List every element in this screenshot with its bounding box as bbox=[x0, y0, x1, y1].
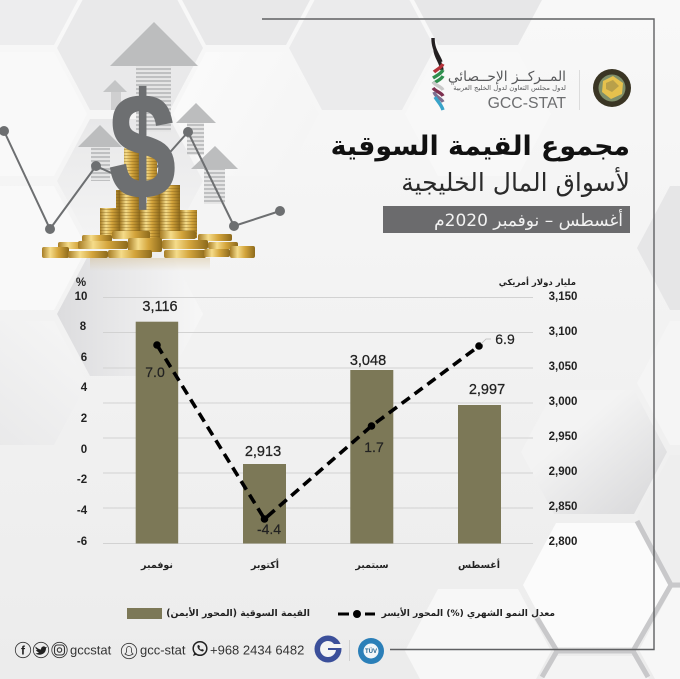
bars bbox=[136, 322, 501, 544]
left axis: -2 bbox=[77, 474, 87, 486]
left axis: 4 bbox=[81, 382, 88, 394]
icon: whatsapp bbox=[193, 642, 207, 656]
left axis: -4 bbox=[77, 505, 88, 517]
legend: growth rate bbox=[338, 607, 555, 619]
growth value labels: 1.7 bbox=[364, 439, 384, 455]
logo text arabic: المــركــز الإحــصائي bbox=[448, 69, 566, 85]
growth value labels bbox=[145, 331, 515, 537]
icon: facebook: f bbox=[21, 644, 26, 658]
growth value labels: -4.4 bbox=[257, 521, 281, 537]
icon: snapchat bbox=[121, 643, 137, 659]
left axis: % bbox=[76, 277, 86, 289]
icon: TUV badge: TÜV bbox=[365, 648, 377, 655]
left axis bbox=[75, 277, 88, 548]
frame line bbox=[262, 19, 654, 650]
left axis: 2 bbox=[81, 413, 87, 425]
right axis: 2,850 bbox=[549, 501, 577, 513]
bar value labels: 2,913 bbox=[245, 444, 281, 460]
right axis bbox=[549, 291, 577, 548]
legend: growth rate: معدل النمو الشهري (%) المحور الأيسر bbox=[381, 607, 555, 619]
right axis: 2,900 bbox=[549, 466, 577, 478]
title: مجموع القيمة السوقية bbox=[331, 131, 630, 162]
illustration: arrows, trend line, dollar and coins bbox=[0, 22, 285, 271]
date banner: أغسطس – نوفمبر 2020م bbox=[434, 209, 623, 231]
grid lines bbox=[103, 298, 533, 544]
bar value labels: 2,997 bbox=[469, 382, 505, 398]
icon: GCC emblem bbox=[593, 69, 631, 107]
left axis: 8 bbox=[80, 321, 87, 333]
icon: dollar sign: $ bbox=[109, 62, 176, 230]
chart: market value and monthly growth bbox=[75, 276, 577, 571]
category labels: أكتوبر bbox=[250, 558, 279, 571]
icon: TUV badge bbox=[358, 638, 384, 664]
icon: twitter bbox=[33, 642, 49, 658]
category labels: سبتمبر bbox=[354, 560, 389, 571]
right axis: 3,150 bbox=[549, 291, 577, 303]
left axis: 6 bbox=[81, 352, 87, 364]
left axis: 10 bbox=[75, 291, 87, 303]
right axis: 3,100 bbox=[549, 326, 577, 338]
category labels: أغسطس bbox=[458, 558, 500, 571]
bar value labels: 3,116 bbox=[142, 299, 178, 315]
subtitle: لأسواق المال الخليجية bbox=[401, 166, 630, 197]
category labels: نوفمبر bbox=[140, 560, 173, 571]
bar value labels: 3,048 bbox=[350, 353, 386, 369]
icon: ISO badge bbox=[314, 636, 342, 662]
logo: GCC-STAT bbox=[433, 38, 631, 112]
growth value labels: 7.0 bbox=[145, 364, 165, 380]
right axis unit: مليار دولار أمريكي bbox=[499, 276, 576, 288]
icon: instagram bbox=[52, 642, 67, 658]
right axis: 2,800 bbox=[549, 536, 577, 548]
handle: gccstat: gccstat bbox=[70, 642, 112, 658]
icon: gold coins bbox=[42, 148, 255, 271]
growth value labels: 6.9 bbox=[495, 331, 515, 347]
phone number: +968 2434 6482 bbox=[210, 642, 304, 658]
icon: rising arrows bbox=[78, 22, 238, 204]
icon: facebook bbox=[15, 642, 31, 658]
logo text latin: GCC-STAT bbox=[488, 95, 566, 112]
growth line bbox=[153, 339, 491, 523]
left axis: -6 bbox=[77, 536, 87, 548]
left axis: 0 bbox=[81, 444, 87, 456]
right axis: 2,950 bbox=[549, 431, 577, 443]
handle: gcc-stat: gcc-stat bbox=[140, 642, 186, 658]
right axis: 3,000 bbox=[549, 396, 577, 408]
legend: market value: القيمة السوقية (المحور الأيمن) bbox=[166, 607, 310, 619]
logo sub text: لدول مجلس التعاون لدول الخليج العربية bbox=[453, 84, 566, 92]
category labels bbox=[140, 558, 500, 571]
icon: trend line bbox=[0, 126, 285, 234]
right axis: 3,050 bbox=[549, 361, 577, 373]
legend bbox=[127, 607, 555, 619]
date banner bbox=[383, 206, 630, 233]
icon: ribbon bbox=[433, 38, 443, 110]
footer: social media and contacts bbox=[15, 636, 384, 664]
bar value labels bbox=[142, 299, 505, 460]
